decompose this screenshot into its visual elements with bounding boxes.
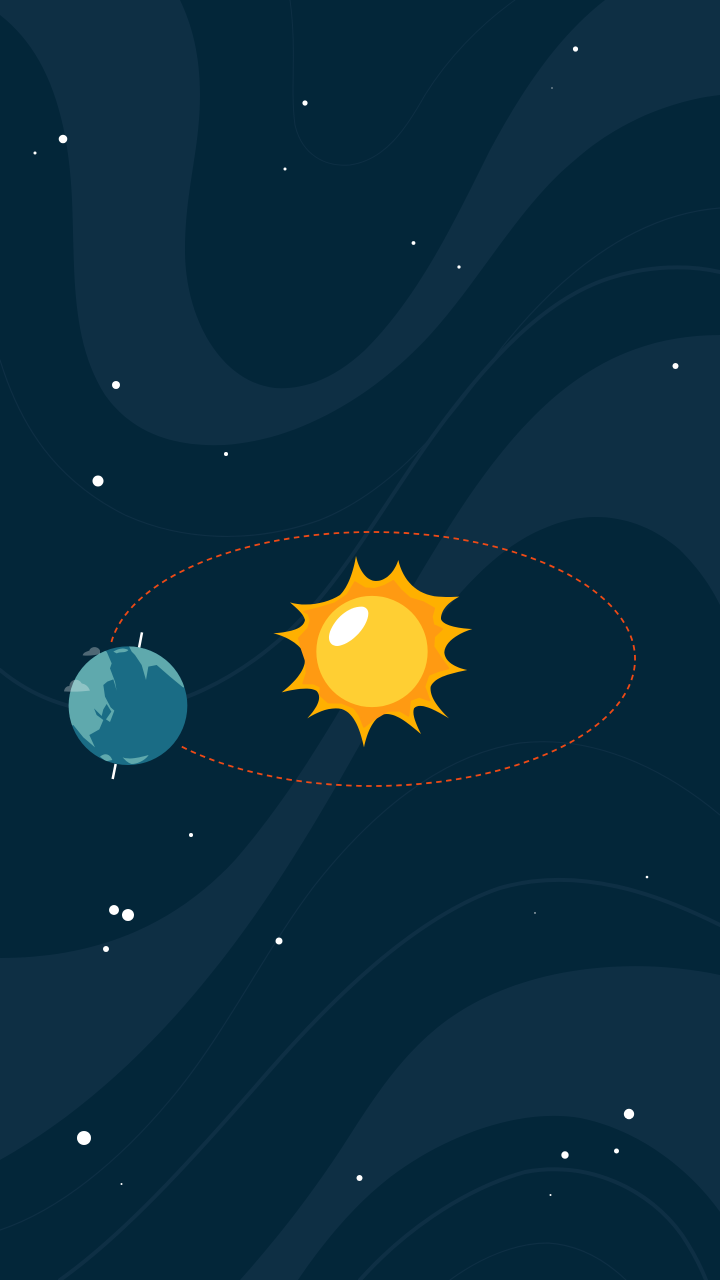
sun: outer rays <box>273 556 472 747</box>
earth: axis <box>113 632 142 779</box>
earth: continents <box>68 646 184 764</box>
sun: highlight <box>329 607 368 646</box>
sun: core disc <box>316 596 428 707</box>
sun <box>273 556 472 747</box>
sun: inner orange corona <box>299 581 448 727</box>
earth: clouds <box>64 647 100 692</box>
orbit path: dashed ellipse <box>111 532 635 786</box>
earth <box>60 632 192 779</box>
earth: ocean disc <box>69 646 187 765</box>
